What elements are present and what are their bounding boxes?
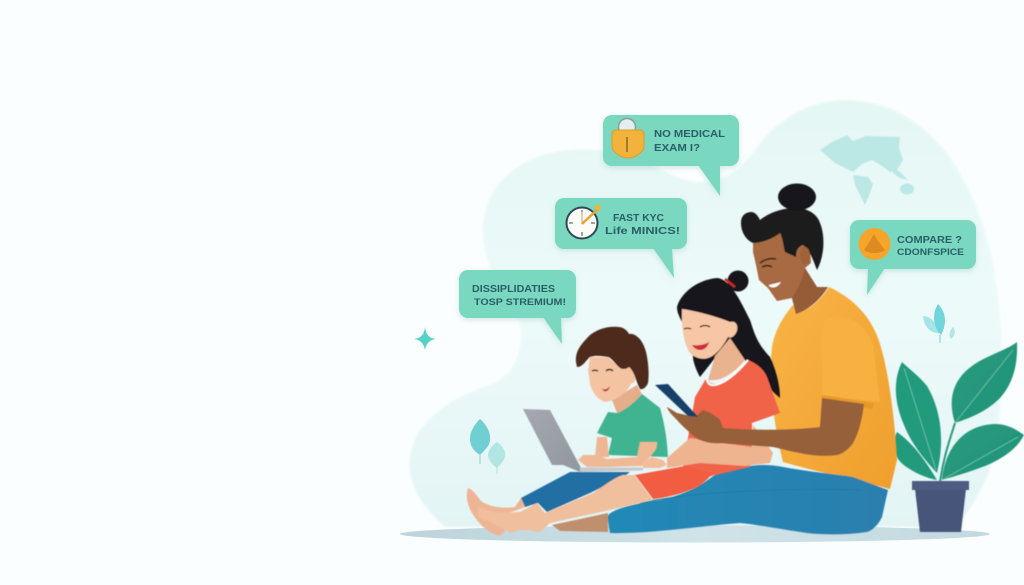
boy jeans [521,472,630,512]
girl leg and foot [478,475,653,533]
speech bubble: discounts: TOSP STREMIUM! [474,297,566,308]
man's eye and brow [760,259,776,267]
boy far arm [595,437,609,457]
bubble text: COMPARE ? [897,235,962,246]
hair [741,208,823,270]
sparkle [414,327,436,350]
girl's eyes [684,326,710,329]
world map [820,135,914,205]
hair tie [725,279,735,287]
long hair [677,278,780,398]
background blob [410,100,1002,527]
arm [667,425,773,468]
girl [552,270,780,532]
boy face [588,357,638,402]
green shirt [597,394,668,457]
man's arm and phone [643,384,874,468]
girl's lips [692,342,709,350]
hair bun [728,270,748,292]
phone [655,384,698,417]
speech bubble: fast kyc [555,198,687,278]
decorative leaves left [470,419,505,474]
orange shirt [771,287,897,489]
speech bubble: discounts [459,270,576,344]
neck [612,385,642,413]
arm and hand [667,398,864,456]
laptop [523,409,643,472]
speech bubble: no medical exam [603,115,739,196]
boy's eyes [592,370,613,371]
girl's hand on laptop [643,457,667,468]
boy near arm and hand [578,442,657,467]
collar [707,360,748,385]
neck and head [753,233,828,314]
boy [467,327,668,536]
man's ear [800,247,810,265]
red shirt [683,360,780,477]
sleeve hem [822,395,874,409]
ground shadow [400,526,990,542]
bubble text: NO MEDICAL [654,129,725,140]
potted plant [894,342,1024,532]
bubble text: FAST KYC [613,213,664,224]
jeans [607,465,888,534]
speech bubble: fast kyc: Life MINICS! [605,226,680,237]
hair bun [778,184,816,210]
speech bubble: compare: CDONFSPICE [897,247,964,258]
pot [912,481,969,532]
man's smile [769,282,781,287]
red shorts [635,466,713,499]
boy hair [576,327,649,389]
decorative leaves right [923,304,955,343]
boy foot [467,488,525,536]
icon: padlock [612,118,644,158]
lower shaded leg [552,513,608,532]
bubble text: DISSIPLIDATIES [472,284,555,295]
icon: coin [858,228,890,260]
man [607,184,897,534]
face [682,309,737,359]
speech bubble: compare [850,220,976,295]
speech bubble: no medical exam: EXAM I? [654,143,700,154]
neck [708,338,745,380]
icon: clock [566,205,601,238]
boy's mouth [602,386,610,391]
